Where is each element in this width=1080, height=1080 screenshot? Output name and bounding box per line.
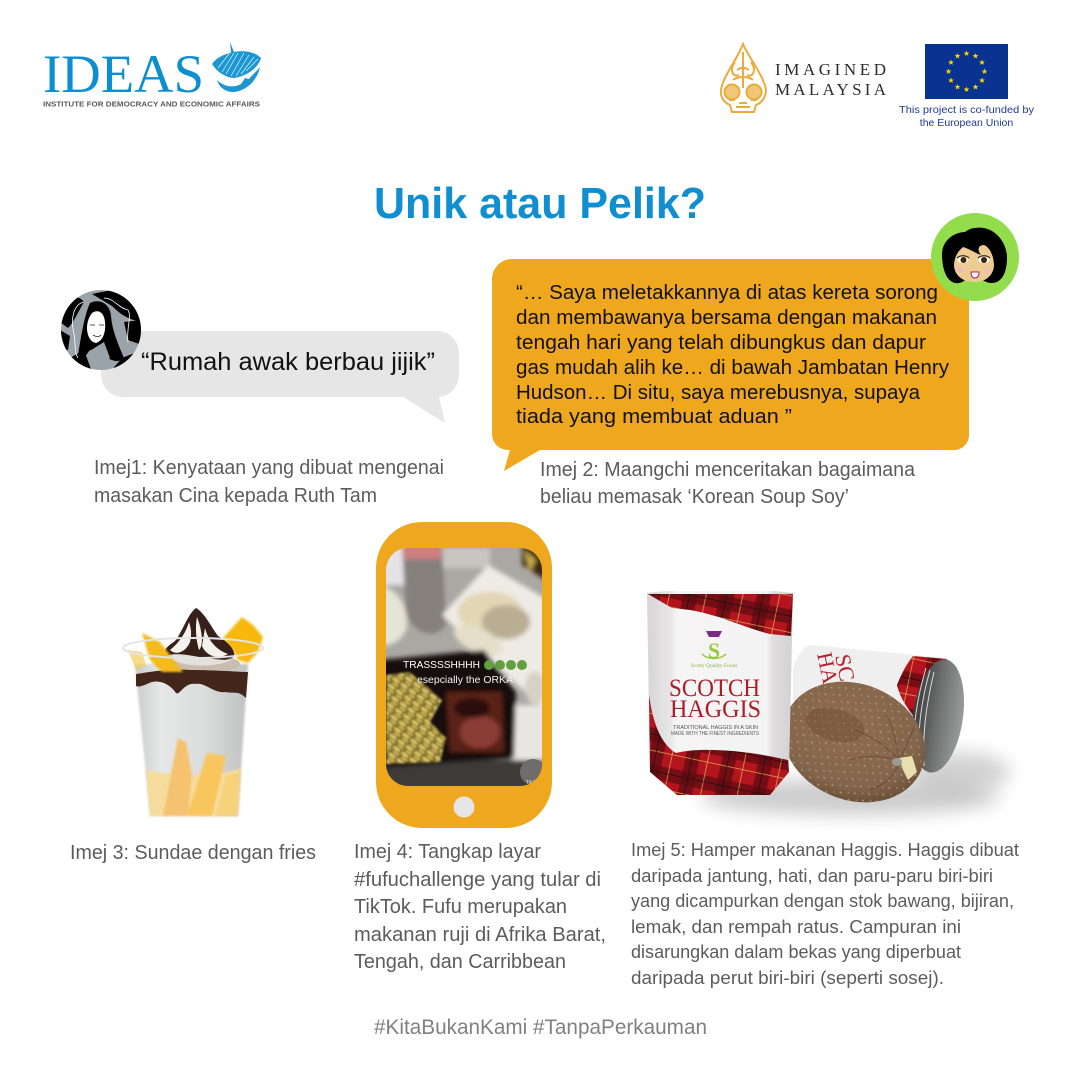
phone screen: esepcially the ORKA (417, 674, 513, 686)
caption: image 5: lemak, dan rempah ratus. Campuran ini (631, 917, 961, 937)
haggis (765, 661, 943, 823)
caption: image 5: daripada perut biri-biri (seperti sosej). (631, 968, 944, 988)
panel: quote 1 speech bubble (101, 331, 459, 423)
fries (146, 738, 241, 816)
title: Unik atau Pelik? (374, 179, 706, 228)
caption: image 1 (94, 457, 444, 507)
caption: image 4: #fufuchallenge yang tular di (354, 869, 601, 891)
caption: image 4: Imej 4: Tangkap layar (354, 841, 541, 863)
mango right (223, 617, 263, 663)
screenshot caption: TRASSSSHHHH (403, 659, 480, 671)
caption: image 1: Imej1: Kenyataan yang dibuat mengenai (94, 457, 444, 479)
box logo (691, 631, 737, 669)
logo: Imagined Malaysia (721, 44, 887, 112)
caption: image 2: beliau memasak ‘Korean Soup Soy’ (540, 486, 849, 508)
tin can: HA (812, 650, 843, 686)
logo: EU flag with funding note: This project is co-funded by (899, 104, 1035, 116)
caption: image 2: Imej 2: Maangchi menceritakan bagaimana (540, 459, 916, 481)
caption: image 4 (354, 841, 606, 973)
logo: Imagined Malaysia: IMAGINED (775, 60, 886, 79)
caption: image 5 (631, 840, 1019, 988)
logo: EU flag with funding note (899, 44, 1035, 129)
panel: quote 2 speech bubble: tiada yang membuat aduan ” (516, 406, 792, 428)
image: sundae with fries (123, 608, 263, 816)
panel: quote 2 speech bubble (492, 259, 969, 471)
drop shadow (700, 779, 1000, 815)
box wordmark: SCOTCH (669, 675, 760, 702)
chocolate sauce (136, 669, 248, 698)
logo: EU flag with funding note: the European Union (920, 117, 1013, 129)
caption: image 3: Imej 3: Sundae dengan fries (70, 842, 316, 864)
hashtags: #KitaBukanKami #TanpaPerkauman (374, 1016, 707, 1039)
panel: quote 1 speech bubble: “Rumah awak berbau jijik” (141, 348, 435, 376)
logo: Imagined Malaysia: MALAYSIA (775, 80, 887, 99)
icon: Maangchi avatar (931, 213, 1019, 301)
panel: quote 2 speech bubble: “… Saya meletakkannya di atas kereta sorong (516, 282, 938, 304)
phone screen (386, 548, 542, 786)
logo: IDEAS (43, 42, 261, 108)
caption: image 4: TikTok. Fufu merupakan (354, 896, 567, 918)
caption: image 5: disarungkan dalam bekas yang diperbuat (631, 942, 961, 962)
box logo: S (708, 638, 720, 663)
image: phone with TikTok screenshot (376, 522, 552, 828)
panel: quote 2 speech bubble: dan membawanya bersama dengan makanan (516, 307, 937, 329)
soft-serve under swirl (156, 654, 240, 674)
logo: IDEAS: IDEAS (43, 44, 204, 104)
hexagonal box: MADE WITH THE FINEST INGREDIENTS (671, 731, 760, 737)
caption: image 4: Tengah, dan Carribbean (354, 951, 566, 973)
image: Scotch Haggis hamper (647, 591, 1010, 823)
phone screen: TikTok (526, 780, 541, 786)
icon: Ruth Tam portrait (60, 288, 142, 372)
hexagonal box (647, 591, 793, 795)
logo: IDEAS: INSTITUTE FOR DEMOCRACY AND ECONOMIC AFFAIRS (43, 100, 260, 108)
cup rim (123, 638, 263, 658)
mango left (142, 633, 183, 672)
caption: image 1: masakan Cina kepada Ruth Tam (94, 485, 377, 507)
tin can: SC (830, 652, 860, 683)
caption: image 5: Imej 5: Hamper makanan Haggis. Haggis dibuat (631, 840, 1019, 860)
panel: quote 2 speech bubble: gas mudah alih ke… di bawah Jambatan Henry (516, 357, 949, 379)
hexagonal box: TRADITIONAL HAGGIS IN A SKIN (673, 725, 758, 731)
caption: image 4: makanan ruji di Afrika Barat, (354, 924, 606, 946)
whipped swirl (164, 608, 234, 666)
panel: quote 2 speech bubble: Hudson… Di situ, saya merebusnya, supaya (516, 382, 921, 404)
box logo: Scotty Quality Foods (691, 663, 737, 669)
icon: IDEAS bird (212, 42, 261, 92)
icon: EU flag (925, 44, 1008, 99)
panel: quote 2 speech bubble: tengah hari yang telah dibungkus dan dapur (516, 332, 926, 354)
caption: image 5: yang dicampurkan dengan stok bawang, bijiran, (631, 891, 1014, 911)
hexagonal box: HAGGIS (670, 696, 761, 723)
icon: wayang gold ornament (721, 44, 766, 112)
caption: image 2 (540, 459, 916, 508)
cup body (135, 664, 248, 816)
phone home button (454, 796, 474, 818)
caption: image 5: daripada jantung, hati, dan paru-paru biri-biri (631, 866, 993, 886)
tin can (793, 645, 971, 776)
